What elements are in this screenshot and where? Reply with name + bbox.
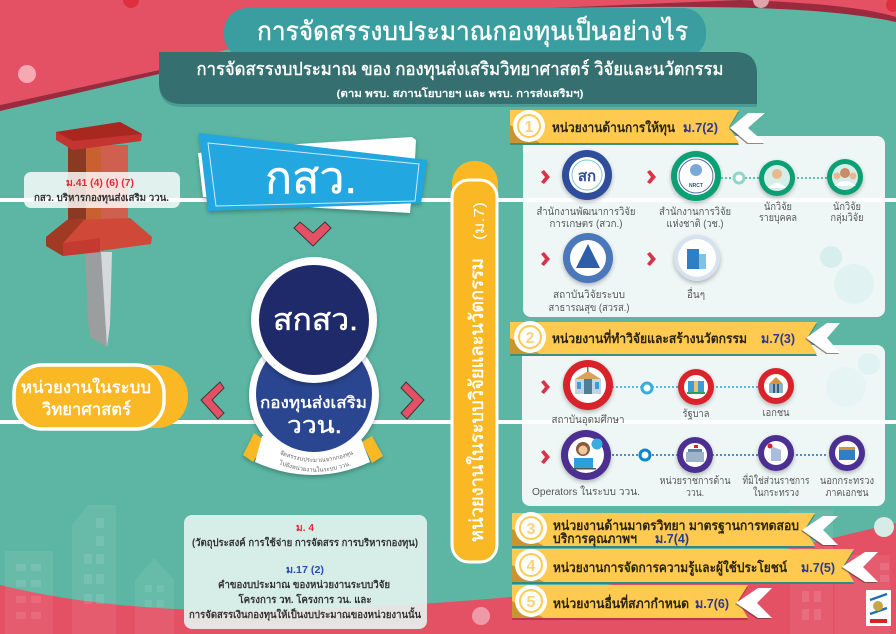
icon: NRCT: NRCT: [689, 183, 703, 189]
labels: panel two: หน่วยราชการด้าน: [660, 475, 730, 487]
badge: fund circle: [242, 356, 384, 479]
callout: section 41: กสว. บริหารกองทุนส่งเสริม ววน.: [34, 192, 169, 204]
vertical pill: หน่วยงานในระบบวิจัยและนวัตกรรม: [466, 258, 488, 542]
callout: section 41: [24, 172, 180, 208]
ribbon caption: จัดสรรงบประมาณจากกองทุน: [280, 450, 354, 462]
labels: panel one: นักวิจัย: [833, 201, 861, 213]
icon: ARDA: [562, 150, 612, 200]
banner 3: บริการคุณภาพฯ: [553, 531, 637, 547]
arrows: panel one: [541, 170, 656, 266]
title pill: [224, 8, 706, 58]
title pill: การจัดสรรงบประมาณกองทุนเป็นอย่างไร: [257, 15, 688, 47]
banner 4: หน่วยงานการจัดการความรู้และผู้ใช้ประโยชน์: [553, 559, 787, 576]
labels: panel one: สำนักงานการวิจัย: [659, 206, 731, 218]
vertical pill: (ม.7): [471, 202, 488, 240]
top red banner: [0, 0, 896, 111]
labels: panel two: ที่มิใช่ส่วนราชการ: [742, 473, 810, 487]
icon: S&T government units: [677, 437, 713, 473]
banner 1: 1: [525, 119, 534, 136]
labels: panel two: ววน.: [686, 487, 704, 499]
pill: science system agencies: หน่วยงานในระบบ: [21, 377, 151, 397]
banner 3: หน่วยงานด้านมาตรวิทยา มาตรฐานการทดสอบ: [553, 518, 799, 535]
icon: universities: [563, 360, 613, 410]
banner 4: ม.7(5): [801, 560, 835, 575]
callout: sections 4 and 17: การจัดสรรเงินกองทุนให้เป็นงบประมาณของหน่วยงานนั้น: [189, 607, 421, 621]
connector: NRCT: [721, 173, 827, 183]
icon: operators: [561, 430, 611, 480]
callout: sections 4 and 17: (วัตถุประสงค์ การใช้จ่าย การจัดสรร การบริหารกองทุน): [192, 536, 418, 549]
banner 2: [510, 321, 840, 356]
banner 5: หน่วยงานอื่นที่สภากำหนด: [553, 594, 689, 611]
labels: panel two: Operators ในระบบ ววน.: [532, 485, 640, 498]
banner 3: [512, 512, 838, 548]
labels: panel one: สาธารณสุข (สวรส.): [548, 302, 630, 314]
labels: panel two: ในกระทรวง: [753, 486, 799, 499]
ribbon caption: [280, 450, 354, 472]
banner 2: หน่วยงานที่ทำวิจัยและสร้างนวัตกรรม: [552, 329, 747, 346]
banner 5: ม.7(6): [695, 596, 729, 611]
panel: research agencies: [522, 345, 885, 506]
labels: panel one: รายบุคคล: [759, 212, 797, 224]
bottom red wave: [0, 517, 896, 634]
banner 1: [510, 110, 765, 145]
sign: TSRI board: [198, 133, 427, 213]
labels: panel two: ภาคเอกชน: [826, 487, 868, 499]
horizontal white lines: [0, 198, 896, 424]
labels: panel one: กลุ่มวิจัย: [830, 212, 864, 224]
banner 1: หน่วยงานด้านการให้ทุน: [552, 119, 675, 136]
labels: panel one: อื่นๆ: [687, 287, 705, 301]
arrow: left chevron: [201, 382, 224, 419]
callout: sections 4 and 17: โครงการ วท. โครงการ วน. และ: [238, 593, 372, 606]
banner 3: ม.7(4): [655, 531, 689, 546]
banner 2: ม.7(3): [761, 331, 795, 346]
logo: [866, 590, 891, 626]
banner 2: 2: [526, 330, 535, 347]
city silhouette right: [790, 510, 890, 634]
icon: others: [674, 235, 720, 281]
subtitle panel: [159, 52, 757, 107]
callout: sections 4 and 17: ม. 4: [296, 523, 314, 534]
labels: panel one: แห่งชาติ (วช.): [666, 218, 724, 230]
labels: panel two: [532, 407, 874, 499]
badge: office circle: [251, 257, 377, 383]
badge: fund circle: กองทุนส่งเสริม: [260, 395, 367, 413]
icon: HSRI: [563, 233, 613, 283]
banner 4: [512, 549, 878, 584]
connector: operators: [612, 450, 828, 460]
banner 3: 3: [527, 521, 536, 538]
callout: sections 4 and 17: [184, 515, 427, 629]
vertical pill: [452, 161, 498, 562]
callout: sections 4 and 17: คำของบประมาณ ของหน่วยงานระบบวิจัย: [218, 579, 390, 591]
sign: TSRI board: กสว.: [265, 154, 357, 203]
labels: panel one: สถาบันวิจัยระบบ: [553, 289, 625, 301]
banner 4: 4: [527, 558, 536, 575]
labels: panel two: นอกกระทรวง: [820, 475, 874, 487]
banner 1: ม.7(2): [683, 120, 718, 135]
ribbon caption: ไปยังหน่วยงานในระบบ ววน.: [280, 459, 350, 472]
arrow: down chevron: [294, 222, 331, 246]
icon: research group: [827, 159, 863, 195]
icon: non-ministry units: [758, 435, 794, 471]
banner 5: [512, 585, 772, 620]
icon: ARDA: สก: [578, 168, 596, 185]
badge: fund circle: ววน.: [287, 412, 342, 438]
labels: panel one: นักวิจัย: [764, 201, 792, 213]
subtitle panel: การจัดสรรงบประมาณ ของ กองทุนส่งเสริมวิทยาศาสตร์ วิจัยและนวัตกรรม: [196, 59, 724, 80]
icon: outside ministry: [829, 435, 865, 471]
arrow: right chevron: [401, 382, 424, 419]
icon: government: [678, 369, 714, 405]
callout: sections 4 and 17: ม.17 (2): [286, 565, 324, 576]
icon: red push pin: [46, 122, 152, 347]
city silhouette left: [5, 505, 174, 634]
labels: panel one: [536, 201, 864, 314]
labels: panel two: เอกชน: [762, 407, 790, 419]
badge: office circle: สกสว.: [273, 304, 358, 337]
banner 5: 5: [527, 594, 536, 611]
callout: section 41: ม.41 (4) (6) (7): [66, 178, 134, 189]
subtitle panel: (ตาม พรบ. สภานโยบายฯ และ พรบ. การส่งเสริมฯ): [336, 87, 584, 100]
connector: universities: [612, 383, 758, 393]
labels: panel one: สำนักงานพัฒนาการวิจัย: [536, 206, 636, 218]
arrows: panel two: [541, 380, 550, 464]
pill: science system agencies: [14, 365, 188, 429]
icon: private sector: [758, 368, 794, 404]
icon: NRCT: [671, 151, 721, 201]
icon: individual researcher: [759, 160, 795, 196]
pill: science system agencies: วิทยาศาสตร์: [42, 400, 131, 419]
labels: panel two: รัฐบาล: [682, 408, 710, 420]
labels: panel one: การเกษตร (สวก.): [550, 218, 622, 230]
panel: funding agencies: [523, 136, 885, 317]
labels: panel two: สถาบันอุดมศึกษา: [552, 414, 624, 426]
